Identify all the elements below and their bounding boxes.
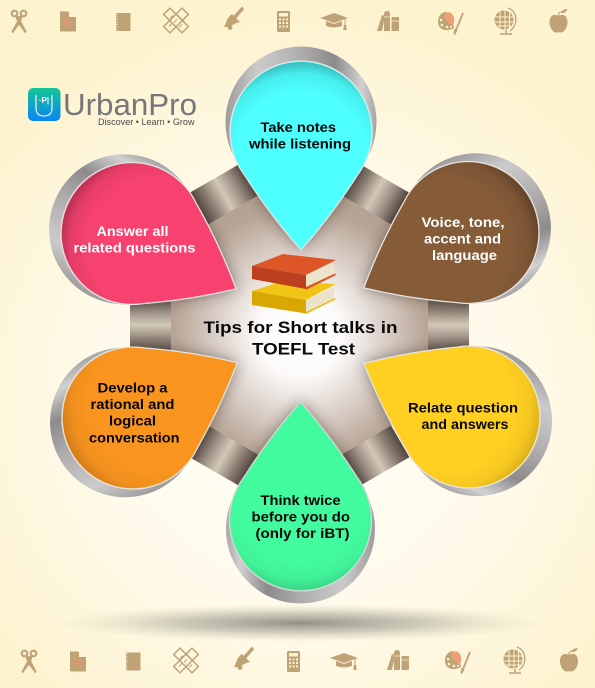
icon: stacked books xyxy=(252,254,336,314)
icon: book letter: B xyxy=(73,655,82,671)
bottom icon row xyxy=(22,647,578,674)
text: answer questions: related questions xyxy=(74,240,196,256)
text: develop conversation: conversation xyxy=(89,430,180,446)
text: take notes: Take notes xyxy=(260,120,336,135)
icon: graduation cap xyxy=(330,653,358,670)
icon: apple xyxy=(560,648,578,672)
text: voice and tone: Voice, tone, xyxy=(422,215,504,230)
connector bars xyxy=(130,164,469,486)
icon: scissors xyxy=(12,11,26,33)
icon: books xyxy=(387,650,409,670)
icon: graduation cap xyxy=(320,13,348,30)
panel: relate question (yellow drop) xyxy=(330,297,578,522)
icon: calculator xyxy=(277,11,290,32)
title: TOEFL Test xyxy=(252,340,355,358)
logo wordmark: UrbanPro xyxy=(63,88,197,122)
icon: book letter xyxy=(70,652,86,672)
text: take notes xyxy=(248,120,351,152)
icon: books xyxy=(377,11,399,31)
text: relate question: Relate question xyxy=(408,400,518,416)
text: voice and tone xyxy=(422,215,504,263)
ground shadow xyxy=(55,604,545,642)
text: think twice: (only for iBT) xyxy=(256,526,350,541)
icon: globe xyxy=(494,8,516,34)
icon: globe xyxy=(504,647,525,673)
text: relate question xyxy=(408,400,518,432)
logo: UrbanPro xyxy=(28,88,197,128)
icon: apple xyxy=(550,9,568,33)
logo tagline: Discover • Learn • Grow xyxy=(98,117,195,128)
icon: book letter xyxy=(60,12,76,32)
title: Tips for Short talks in xyxy=(204,318,398,337)
icon: bell xyxy=(224,9,242,30)
title xyxy=(204,318,398,358)
text: think twice: before you do xyxy=(252,510,350,524)
text: develop conversation: logical xyxy=(109,414,156,428)
icon: logo badge xyxy=(28,88,60,121)
text: relate question: and answers xyxy=(422,417,509,432)
icon: crossed rulers xyxy=(164,8,188,33)
panel: answer questions (pink drop) xyxy=(23,128,271,355)
text: develop conversation: rational and xyxy=(90,397,174,412)
panel: take notes (cyan drop) xyxy=(226,46,376,250)
panel: develop conversation (orange drop) xyxy=(24,296,272,524)
icon: calculator xyxy=(287,651,300,672)
panel: voice and tone (brown drop) xyxy=(329,127,577,354)
icon: notebook xyxy=(124,652,140,670)
panel: think twice (green drop) xyxy=(226,402,375,604)
drop shadows on hub xyxy=(130,165,469,485)
text: answer questions xyxy=(74,224,196,256)
icon: palette and brush xyxy=(438,12,463,35)
text: voice and tone: accent and xyxy=(424,232,501,246)
text: develop conversation: Develop a xyxy=(98,380,168,396)
icon: book letter: B xyxy=(63,15,72,31)
icon: bell xyxy=(234,649,252,670)
icon: logo badge: ·P| xyxy=(39,96,49,105)
icon: crossed rulers xyxy=(174,648,198,673)
icon: notebook xyxy=(114,13,130,31)
top icon row xyxy=(12,8,568,35)
central hexagon xyxy=(171,171,428,479)
text: think twice: Think twice xyxy=(260,493,341,508)
text: think twice xyxy=(252,493,350,541)
text: take notes: while listening xyxy=(248,136,351,152)
text: develop conversation xyxy=(89,380,180,446)
text: answer questions: Answer all xyxy=(96,224,168,239)
text: voice and tone: language xyxy=(432,248,497,263)
icon: scissors xyxy=(22,651,36,674)
icon: palette and brush xyxy=(445,651,470,674)
